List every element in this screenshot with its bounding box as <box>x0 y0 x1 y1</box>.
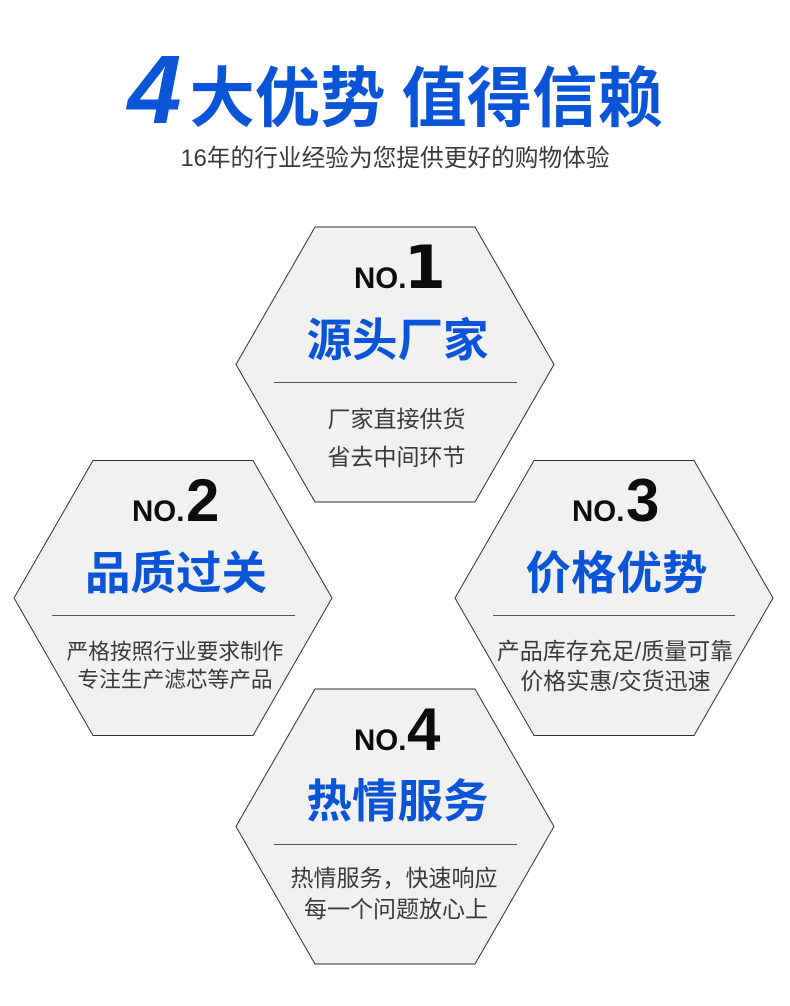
heading: 价格优势 <box>525 537 708 603</box>
number label 4: 4 <box>407 696 441 763</box>
panel: no.4 service <box>236 689 554 964</box>
description: 产品库存充足/质量可靠 <box>497 638 733 664</box>
number label 3 <box>572 467 659 534</box>
title: 4 <box>126 35 181 144</box>
number label 2: 2 <box>186 467 219 534</box>
description <box>290 865 498 922</box>
number label 2 <box>132 467 219 534</box>
heading: 源头厂家 <box>306 304 489 370</box>
description <box>328 406 466 470</box>
heading: 热情服务 <box>306 765 489 831</box>
description: 热情服务，快速响应 <box>290 865 498 891</box>
number label 4: NO. <box>354 724 406 757</box>
description: 价格实惠/交货迅速 <box>520 668 711 694</box>
title: 大优势 <box>190 45 385 140</box>
description: 厂家直接供货 <box>328 406 466 432</box>
number label 4 <box>354 696 441 763</box>
panel: no.2 quality <box>14 460 332 736</box>
subtitle: 16年的行业经验为您提供更好的购物体验 <box>180 145 610 172</box>
number label 1: NO. <box>354 262 406 295</box>
description <box>497 638 733 694</box>
heading: 品质过关 <box>85 537 267 603</box>
panel: no.3 price <box>455 460 773 736</box>
title <box>126 35 663 144</box>
number label 3: NO. <box>572 495 624 528</box>
number label 2: NO. <box>132 495 184 528</box>
description: 专注生产滤芯等产品 <box>77 667 273 692</box>
title: 值得信赖 <box>402 45 663 140</box>
description: 严格按照行业要求制作 <box>67 639 283 664</box>
number label 3: 3 <box>626 467 659 534</box>
description: 省去中间环节 <box>328 444 466 470</box>
number label 1: 1 <box>404 233 446 303</box>
panel: no.1 source factory <box>236 227 554 502</box>
description <box>67 639 283 692</box>
description: 每一个问题放心上 <box>304 896 488 922</box>
number label 1 <box>354 233 446 303</box>
